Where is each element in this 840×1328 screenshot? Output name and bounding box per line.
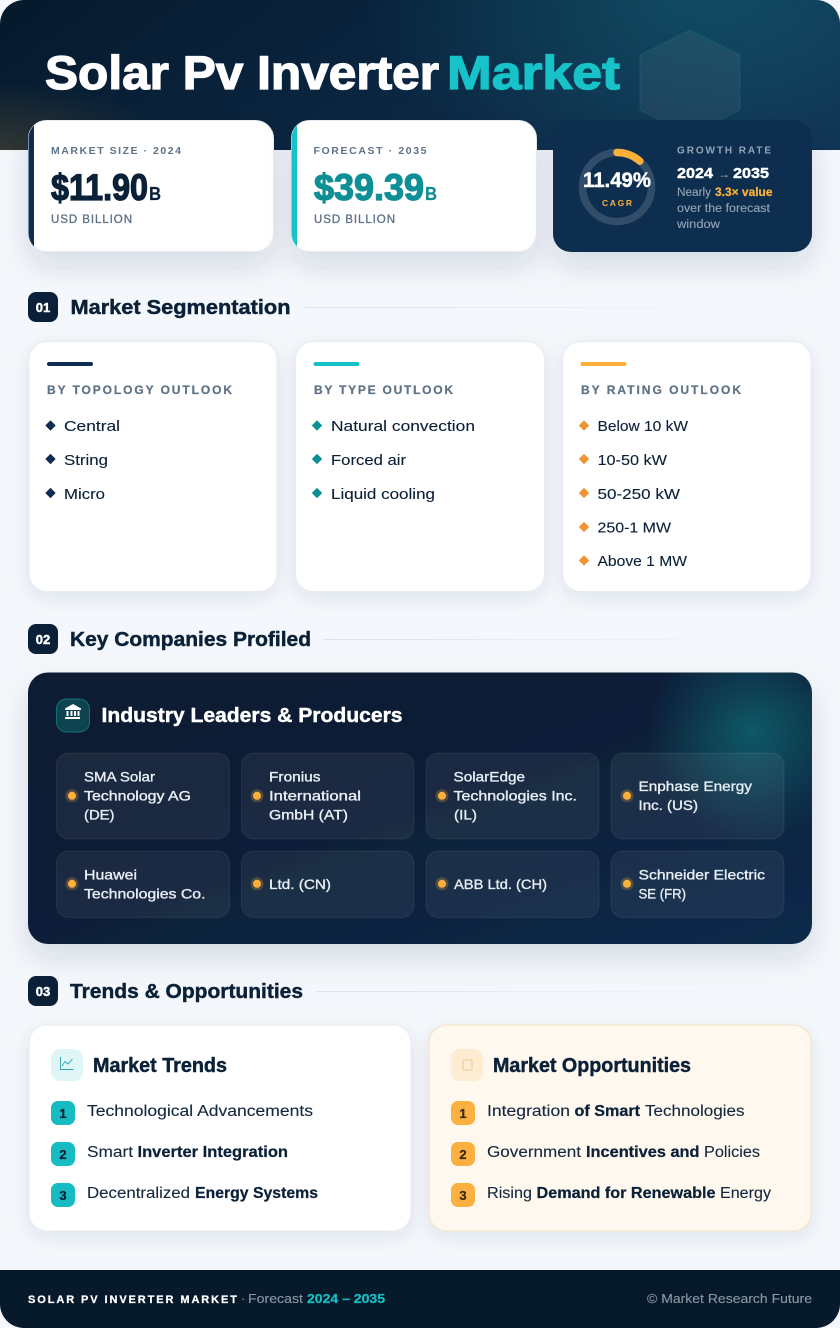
panel: by type outlook: Liquid cooling bbox=[331, 486, 435, 503]
opportunity item 3: 3 bbox=[459, 1188, 467, 1203]
company: Fronius bbox=[242, 753, 414, 839]
stat card: market size 2024 bbox=[28, 120, 274, 252]
company: Huawei: Huawei bbox=[84, 866, 137, 882]
growth rate text: 3.3× value bbox=[715, 187, 772, 199]
trend item 3: Decentralized bbox=[87, 1185, 190, 1202]
company: Fronius: GmbH (AT) bbox=[269, 807, 348, 823]
stat card: forecast 2035: USD BILLION bbox=[314, 214, 395, 226]
growth rate text: 2024 bbox=[677, 165, 714, 182]
panel: by type outlook bbox=[296, 342, 544, 592]
section heading 01: Market Segmentation bbox=[70, 296, 290, 319]
opportunity item 3 bbox=[451, 1183, 771, 1207]
stat card: market size 2024: B bbox=[149, 184, 161, 204]
company: Ltd. (CN) bbox=[242, 851, 414, 918]
icon: chart bbox=[51, 1049, 83, 1081]
growth rate text: Nearly bbox=[677, 187, 711, 199]
opportunity item 3: Rising bbox=[487, 1185, 532, 1202]
company: SolarEdge: Technologies Inc. bbox=[454, 788, 577, 804]
company: SolarEdge: SolarEdge bbox=[454, 769, 525, 785]
stat card: forecast 2035: FORECAST · 2035 bbox=[314, 145, 427, 157]
opportunity item 1 bbox=[451, 1101, 745, 1125]
panel: by rating outlook: Above 1 MW bbox=[598, 553, 688, 570]
company: SMA Solar: (DE) bbox=[84, 807, 114, 823]
decorative hexagon bbox=[640, 30, 740, 135]
company: Enphase: Inc. (US) bbox=[638, 797, 698, 813]
trend item 1: 1 bbox=[59, 1106, 67, 1121]
panel: by topology outlook: Central bbox=[64, 418, 120, 435]
section heading 03: 03 bbox=[36, 984, 50, 999]
stat card: market size 2024: MARKET SIZE · 2024 bbox=[51, 145, 181, 157]
opportunity item 1: of Smart bbox=[574, 1103, 640, 1120]
opportunity item 2: Government bbox=[487, 1144, 582, 1161]
trend item 3: 3 bbox=[59, 1188, 67, 1203]
stat card: forecast 2035 bbox=[291, 120, 536, 252]
footer: · bbox=[241, 1292, 245, 1306]
footer bbox=[0, 1270, 840, 1328]
panel: by topology outlook: String bbox=[64, 452, 108, 469]
section heading 02: Key Companies Profiled bbox=[70, 628, 311, 651]
panel: market trends bbox=[29, 1025, 411, 1231]
company: Schneider Electric: SE (FR) bbox=[638, 886, 686, 902]
panel: by type outlook: BY TYPE OUTLOOK bbox=[314, 383, 453, 397]
panel: by topology outlook bbox=[29, 342, 277, 592]
section heading 03: Trends & Opportunities bbox=[70, 980, 303, 1003]
company: Fronius: Fronius bbox=[269, 769, 320, 785]
title bbox=[45, 46, 620, 99]
company: Ltd. (CN): Ltd. (CN) bbox=[269, 876, 331, 892]
trend item 1 bbox=[51, 1101, 313, 1125]
CAGR ring gauge: 11.49% bbox=[583, 169, 651, 192]
company: Enphase bbox=[611, 753, 784, 839]
stat card: CAGR growth rate bbox=[553, 120, 812, 252]
company: ABB bbox=[426, 851, 599, 918]
company: SolarEdge: (IL) bbox=[454, 807, 477, 823]
trend item 2: Smart bbox=[87, 1144, 134, 1161]
company: SMA Solar bbox=[56, 753, 230, 839]
title: Market bbox=[447, 46, 620, 99]
stat card: forecast 2035: $39.39 bbox=[314, 167, 424, 208]
company: ABB: ABB Ltd. (CH) bbox=[454, 876, 547, 892]
growth rate text: over the forecast bbox=[677, 203, 771, 215]
stat card: market size 2024: USD BILLION bbox=[51, 214, 132, 226]
trend item 3: Energy Systems bbox=[195, 1185, 318, 1202]
company: Schneider Electric bbox=[611, 851, 784, 918]
footer: 2024 – 2035 bbox=[307, 1292, 385, 1306]
footer: SOLAR PV INVERTER MARKET bbox=[28, 1294, 237, 1306]
panel: by type outlook: Natural convection bbox=[331, 418, 475, 435]
header banner bbox=[0, 0, 840, 150]
company: Huawei: Technologies Co. bbox=[84, 886, 206, 902]
opportunity item 1: Integration bbox=[487, 1103, 570, 1120]
CAGR ring gauge bbox=[582, 152, 652, 222]
panel: by rating outlook: 50-250 kW bbox=[598, 486, 681, 503]
icon: missing glyph box bbox=[451, 1049, 483, 1081]
opportunity item 2: Incentives and bbox=[586, 1144, 700, 1161]
panel: by topology outlook: Micro bbox=[64, 486, 105, 503]
card heading: Market Opportunities bbox=[493, 1055, 691, 1077]
icon: institution bbox=[56, 699, 90, 732]
panel: by rating outlook: Below 10 kW bbox=[598, 418, 689, 435]
title: Solar Pv Inverter bbox=[45, 46, 439, 99]
panel: by rating outlook: BY RATING OUTLOOK bbox=[581, 383, 741, 397]
company: SMA Solar: SMA Solar bbox=[84, 769, 155, 785]
trend item 2 bbox=[51, 1142, 288, 1166]
panel: by type outlook: Forced air bbox=[331, 452, 406, 469]
footer: Forecast bbox=[248, 1292, 304, 1306]
opportunity item 2 bbox=[451, 1142, 760, 1166]
section heading 01: 01 bbox=[36, 300, 50, 315]
growth rate text: GROWTH RATE bbox=[677, 146, 771, 156]
company: SolarEdge bbox=[426, 753, 599, 839]
section heading 01 bbox=[28, 292, 740, 322]
trend item 2: 2 bbox=[59, 1147, 67, 1162]
CAGR ring gauge: CAGR bbox=[602, 198, 632, 208]
section heading 03 bbox=[28, 976, 753, 1006]
growth rate text bbox=[676, 146, 772, 231]
panel: by rating outlook: 250-1 MW bbox=[598, 520, 672, 536]
panel heading: Industry Leaders & Producers bbox=[102, 704, 402, 727]
opportunity item 2: Policies bbox=[704, 1144, 760, 1161]
company: Fronius: International bbox=[269, 788, 361, 804]
panel: market opportunities bbox=[429, 1025, 811, 1231]
stat card: market size 2024: $11.90 bbox=[51, 167, 148, 208]
panel: by rating outlook bbox=[562, 342, 811, 592]
panel: by topology outlook: BY TOPOLOGY OUTLOOK bbox=[47, 383, 232, 397]
opportunity item 3: Demand for Renewable bbox=[536, 1185, 716, 1202]
footer: © Market Research Future bbox=[647, 1292, 812, 1306]
panel: key companies bbox=[28, 672, 812, 944]
section heading 02 bbox=[28, 624, 760, 654]
opportunity item 1: Technologies bbox=[645, 1103, 745, 1120]
company: SMA Solar: Technology AG bbox=[84, 788, 191, 804]
trend item 3 bbox=[51, 1183, 318, 1207]
trend item 2: Inverter Integration bbox=[138, 1144, 288, 1161]
panel: by rating outlook: 10-50 kW bbox=[598, 452, 668, 469]
trend item 1: Technological Advancements bbox=[87, 1103, 313, 1120]
opportunity item 2: 2 bbox=[459, 1147, 467, 1162]
stat card: forecast 2035: B bbox=[425, 184, 437, 204]
growth rate text: 2035 bbox=[733, 165, 769, 182]
card heading: Market Trends bbox=[93, 1055, 227, 1077]
section heading 02: 02 bbox=[36, 632, 50, 647]
opportunity item 1: 1 bbox=[459, 1106, 467, 1121]
opportunity item 3: Energy bbox=[720, 1185, 771, 1202]
company: Enphase: Enphase Energy bbox=[638, 778, 752, 794]
growth rate text: → bbox=[718, 167, 730, 181]
company: Schneider Electric: Schneider Electric bbox=[638, 866, 765, 882]
company: Huawei bbox=[56, 851, 230, 918]
growth rate text: window bbox=[676, 219, 721, 231]
